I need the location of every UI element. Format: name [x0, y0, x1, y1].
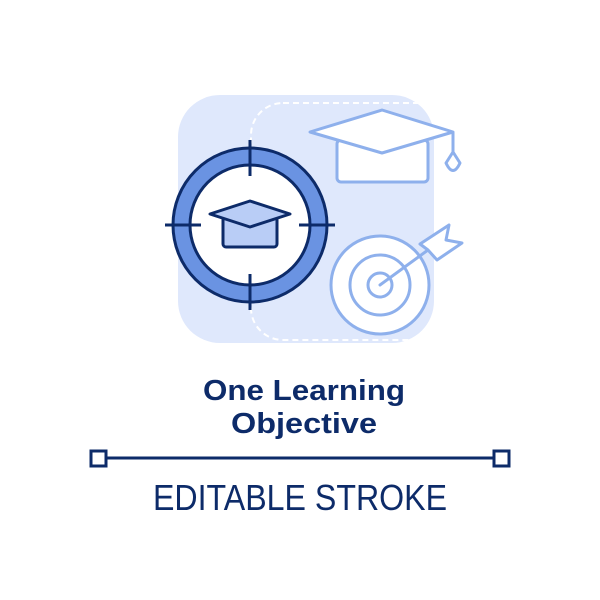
icon: large graduation cap — [310, 110, 460, 182]
subtitle: EDITABLE STROKE — [153, 477, 447, 518]
dashed outline — [251, 103, 451, 340]
title — [203, 375, 405, 440]
icon: target with arrow — [331, 225, 462, 334]
icon: small graduation cap — [210, 201, 290, 247]
background rounded square — [178, 95, 434, 343]
title: Objective — [231, 408, 377, 440]
divider with handles — [91, 451, 509, 466]
title: One Learning — [203, 375, 405, 407]
icon: crosshair target — [165, 140, 335, 310]
